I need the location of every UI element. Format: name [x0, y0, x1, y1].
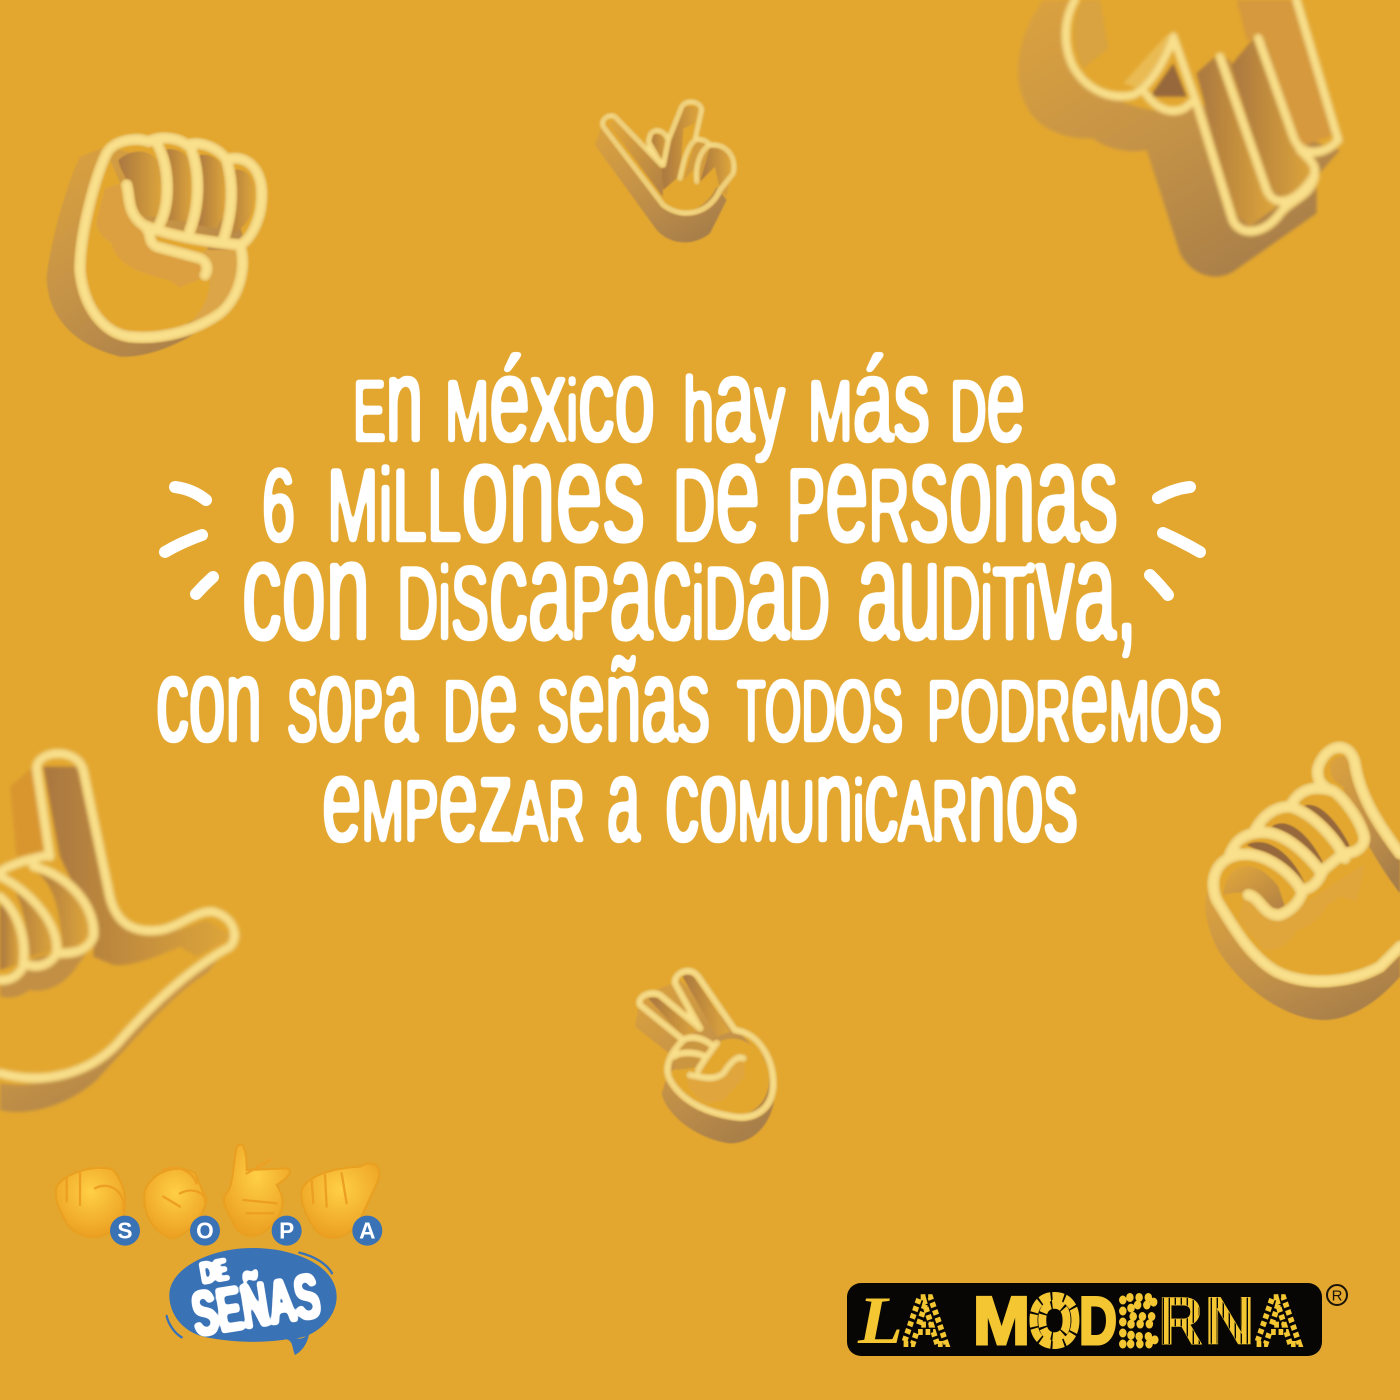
word DE: DE: [197, 1253, 231, 1291]
line 1: México: [445, 334, 655, 467]
icon: blurred pasta hand top right: [1018, 0, 1340, 277]
letter badge P: P: [279, 1218, 294, 1244]
line 1: En: [353, 334, 423, 467]
speech bubble: [169, 1248, 337, 1355]
line 2: [262, 413, 1118, 572]
line 1: De: [950, 334, 1025, 467]
logo letters: O: [1031, 1283, 1078, 1359]
line 3: con: [242, 511, 370, 670]
icon: right emphasis rays: [1150, 487, 1200, 595]
line 5: a: [607, 734, 640, 867]
logo hand A: [301, 1163, 379, 1238]
logo letters: E: [1119, 1283, 1157, 1359]
line 5: [322, 734, 1078, 867]
letter badge A: A: [359, 1218, 375, 1244]
line 4: Señas: [537, 634, 710, 767]
line 5: eMPezAR: [322, 734, 585, 867]
letter badge A: [352, 1216, 382, 1246]
logo hand S: [56, 1168, 125, 1237]
bubble accent strokes: [167, 1253, 332, 1337]
line 4: PODReMOS: [927, 634, 1222, 767]
registered mark: [1327, 1285, 1347, 1305]
line 3: DiScaPaciDaD: [397, 511, 830, 670]
registered mark: R: [1332, 1288, 1343, 1304]
icon: pasta hand right: [1205, 747, 1400, 1020]
line 2: De: [673, 413, 760, 572]
logo letters: A: [902, 1283, 948, 1359]
line 4: [156, 634, 1222, 767]
letter badge S: S: [117, 1218, 133, 1244]
word SEÑAS: SEÑAS: [187, 1260, 325, 1351]
line 4: con: [156, 634, 262, 767]
line 4: TODOS: [737, 663, 903, 760]
letter badge S: [110, 1216, 140, 1246]
logo letters: A: [1255, 1283, 1301, 1359]
icon: pasta pointing hand top centre: [595, 102, 734, 242]
line 2: PeRsonas: [787, 413, 1118, 572]
logo letters: N: [1204, 1283, 1255, 1359]
line 2: 6: [262, 448, 295, 564]
line 5: coMUnicARnos: [665, 734, 1078, 867]
icon: blurred pasta hand left: [0, 754, 235, 1112]
logo letters: M: [973, 1283, 1030, 1359]
letter badge O: [190, 1216, 220, 1246]
line 1: Más: [808, 334, 930, 467]
logo letters: L: [857, 1282, 903, 1358]
line 2: MiLLones: [327, 413, 645, 572]
logo letters: [857, 1282, 1301, 1359]
icon: pasta peace hand bottom centre: [635, 971, 775, 1143]
line 3: [242, 511, 1137, 670]
letter badge P: [272, 1216, 302, 1246]
icon: pasta fist top left: [47, 138, 262, 357]
main message text: [156, 334, 1222, 867]
logo hand O: [144, 1168, 207, 1238]
line 4: De: [443, 634, 518, 767]
letter badge O: O: [196, 1218, 214, 1244]
line 4: SoPa: [287, 634, 418, 767]
icon: left emphasis rays: [165, 487, 213, 594]
line 3: auDiTiva,: [857, 511, 1137, 670]
logo letters: D: [1079, 1283, 1117, 1359]
line 1: hay: [683, 334, 785, 467]
logo hand P: [224, 1145, 290, 1236]
logo: Sopa de Señas: [56, 1145, 382, 1355]
logo letters: R: [1158, 1283, 1203, 1359]
logo plate: [847, 1283, 1322, 1356]
logo: La Moderna: [847, 1282, 1347, 1359]
line 1: [353, 334, 1025, 467]
